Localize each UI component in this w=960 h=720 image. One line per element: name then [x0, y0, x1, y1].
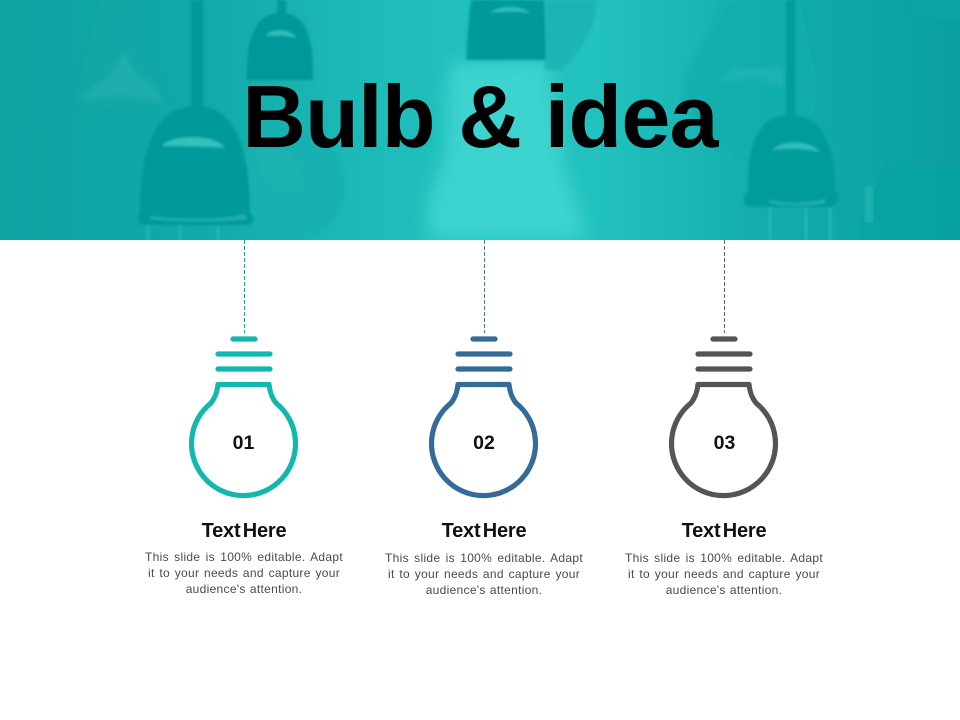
- description 02: [385, 551, 583, 597]
- description 01: audience's attention.: [186, 582, 302, 596]
- title: Bulb & idea: [242, 67, 718, 166]
- bulb 03 with hanging wire: 03: [714, 432, 735, 454]
- bulb 01 with hanging wire: 01: [233, 432, 254, 454]
- description 03: [625, 551, 823, 597]
- heading 02: Text Here: [442, 520, 526, 542]
- bulb 02 with hanging wire: 02: [473, 432, 495, 454]
- description 03: it to your needs and capture your: [628, 567, 820, 581]
- heading 03: Text Here: [682, 520, 766, 542]
- description 03: This slide is 100% editable. Adapt: [625, 551, 823, 565]
- bulb 02 with hanging wire: [428, 240, 538, 498]
- text block 01: [145, 520, 343, 596]
- bulb 01 with hanging wire: [188, 240, 298, 498]
- description 02: it to your needs and capture your: [388, 567, 580, 581]
- text block 02: [385, 520, 583, 597]
- description 03: audience's attention.: [666, 583, 782, 597]
- description 01: it to your needs and capture your: [148, 566, 340, 580]
- description 02: audience's attention.: [426, 583, 542, 597]
- description 02: This slide is 100% editable. Adapt: [385, 551, 583, 565]
- text block 03: [625, 520, 823, 597]
- bulb 03 with hanging wire: [668, 240, 778, 498]
- banner: teal photo of hanging bulbs: [0, 0, 960, 240]
- description 01: [145, 550, 343, 596]
- heading 01: Text Here: [202, 520, 286, 542]
- description 01: This slide is 100% editable. Adapt: [145, 550, 343, 564]
